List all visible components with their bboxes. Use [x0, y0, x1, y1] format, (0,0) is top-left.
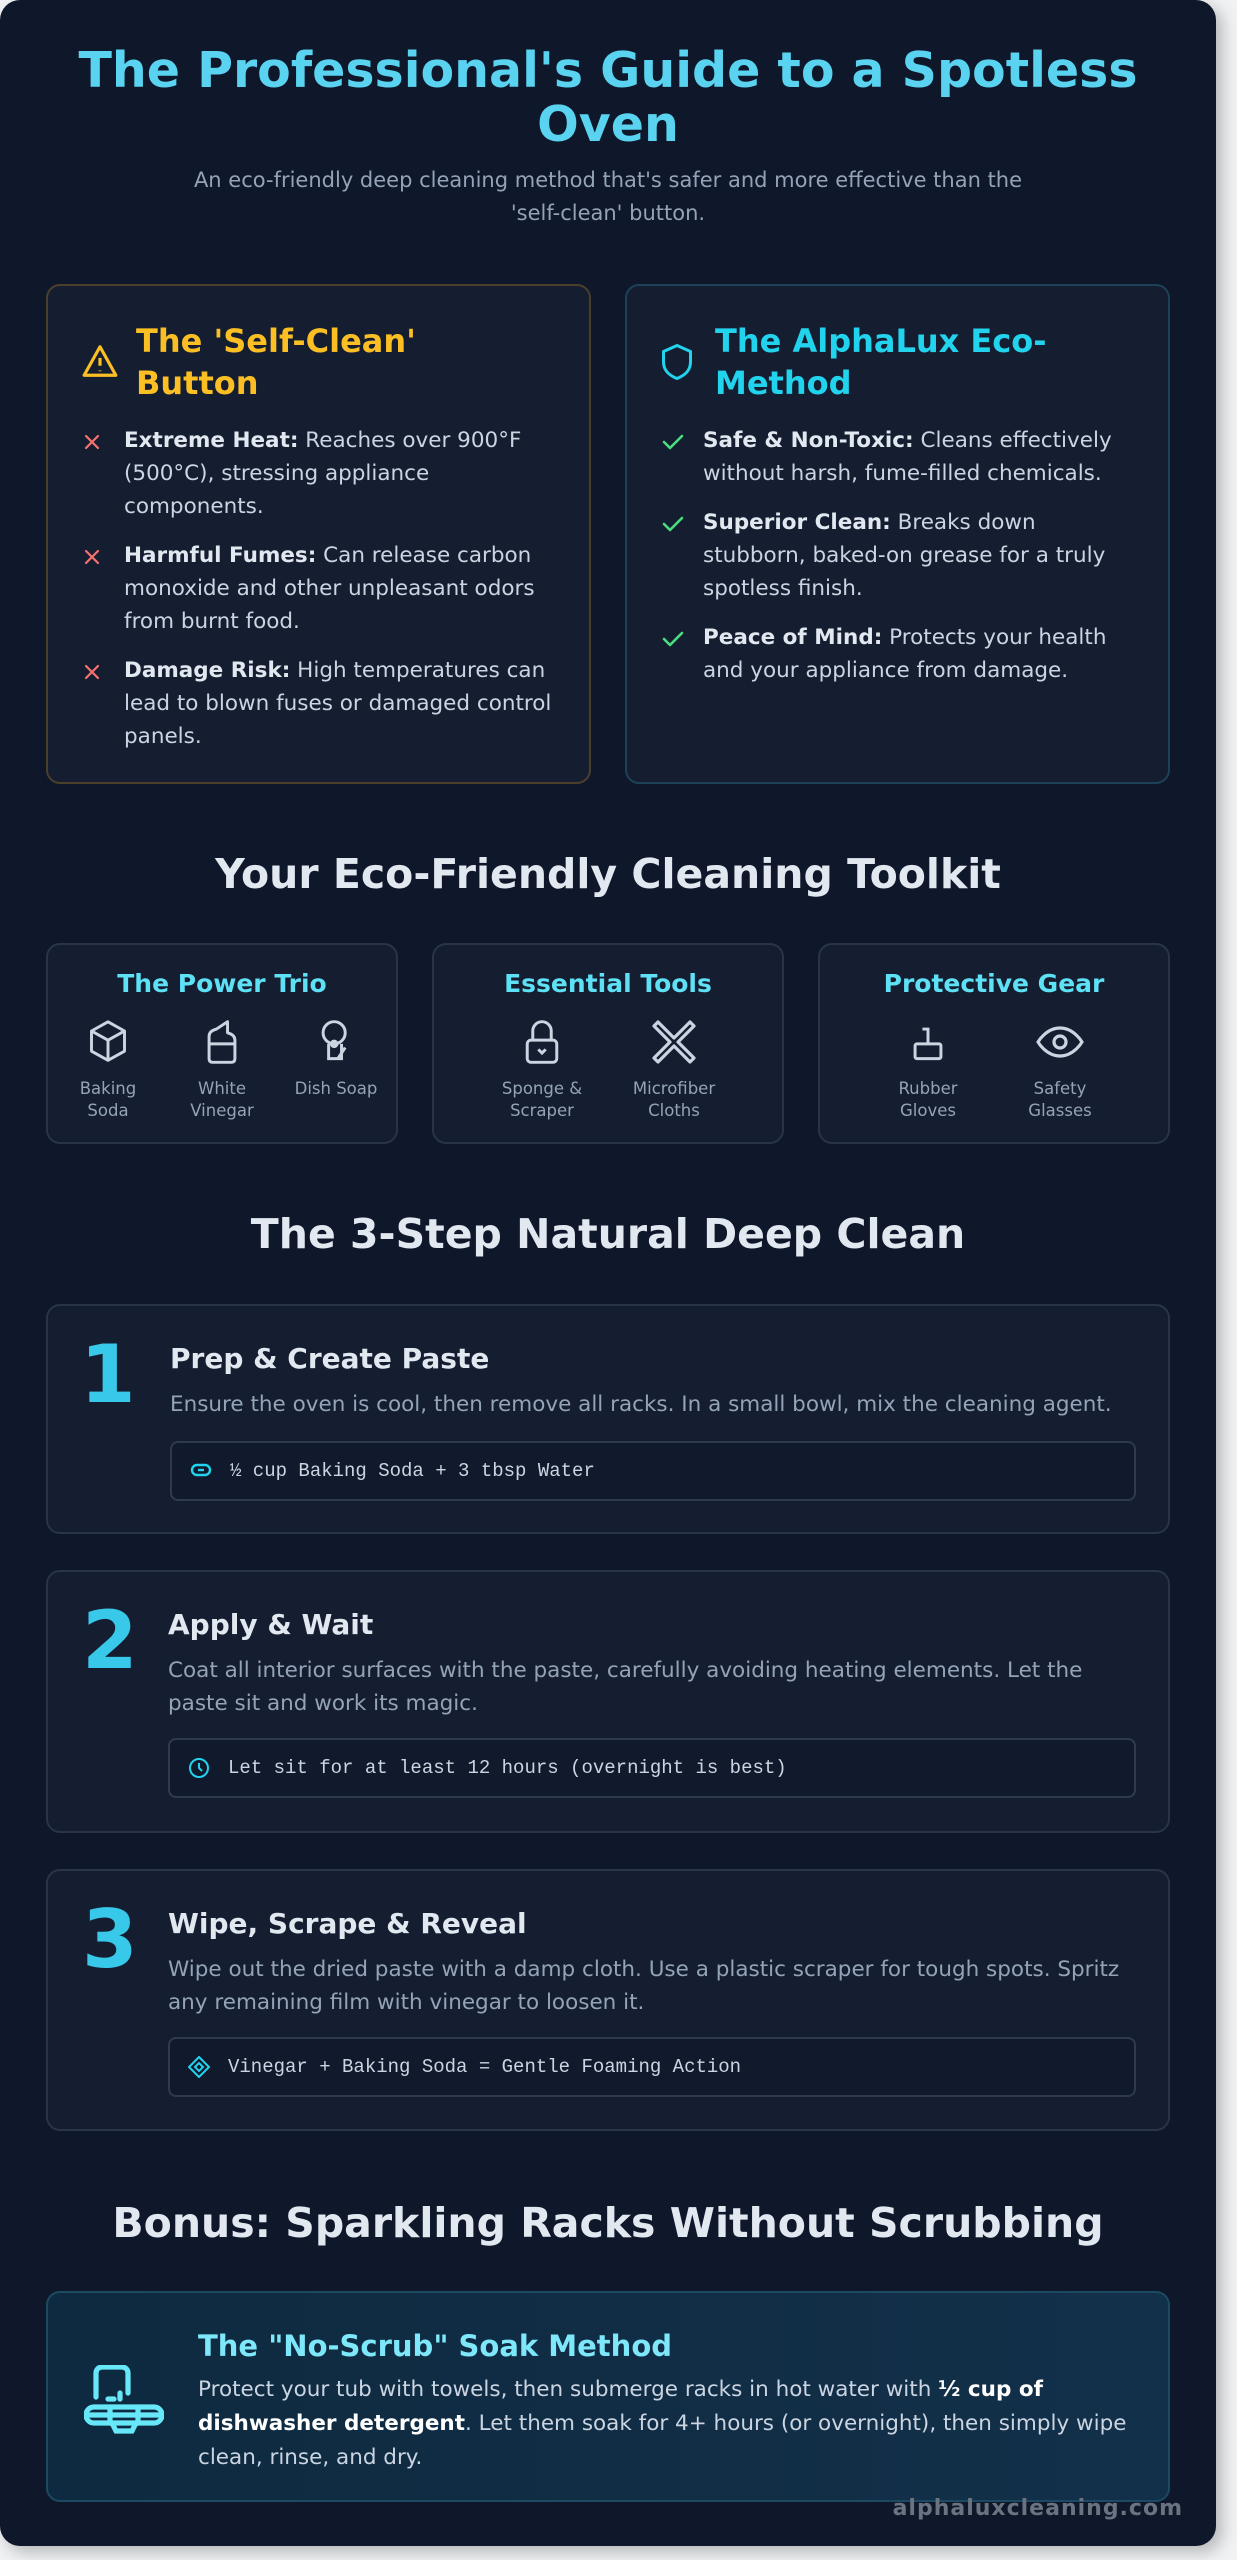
icon: gloves: Rubber Gloves — [898, 1079, 958, 1120]
list: benefits: Superior Clean: Breaks down stubborn, baked-on grease for a truly spotless finish. — [703, 510, 1105, 601]
heading: self-clean — [136, 322, 416, 402]
bonus text: Protect your tub with towels, then submerge racks in hot water with ½ cup of dishwasher detergent. Let them soak for 4+ hours (or overnight), then simply wipe clean, rinse, and dry. — [198, 2377, 1126, 2470]
code: foaming — [168, 2037, 1136, 2097]
icon: sponge — [502, 1020, 582, 1120]
icon: dish soap — [295, 1020, 377, 1098]
panel: step 2: Coat all interior surfaces with the paste, carefully avoiding heating elements. Let the paste sit and work its magic. — [168, 1658, 1082, 1716]
icon: sponge: Sponge & Scraper — [502, 1079, 582, 1120]
list: drawbacks — [84, 428, 551, 749]
panel: self-clean button — [46, 284, 591, 784]
panel: step 3 — [46, 1869, 1170, 2131]
panel: bonus soak — [46, 2291, 1170, 2502]
panel: protective gear: Protective Gear — [884, 969, 1104, 998]
list: drawbacks: Extreme Heat: Reaches over 900°F (500°C), stressing appliance components. — [124, 428, 521, 519]
footer: website: alphaluxcleaning.com — [893, 2496, 1183, 2521]
heading: toolkit: Your Eco-Friendly Cleaning Toolkit — [215, 850, 1001, 898]
heading: self-clean: The 'Self-Clean' — [136, 322, 416, 360]
panel: power trio — [46, 943, 398, 1144]
panel: step 3: Wipe, Scrape & Reveal — [168, 1907, 527, 1940]
heading: bonus: Bonus: Sparkling Racks Without Scrubbing — [112, 2199, 1104, 2247]
icon: shield — [662, 344, 692, 380]
icon: eye: Safety Glasses — [1028, 1079, 1092, 1120]
icon: tub — [84, 2365, 164, 2434]
panel: step 1: Prep & Create Paste — [170, 1342, 489, 1375]
icon: dish soap: Dish Soap — [295, 1079, 377, 1098]
code: recipe — [170, 1441, 1136, 1501]
panel: protective gear — [818, 943, 1170, 1144]
heading: eco method — [715, 322, 1047, 402]
code: timer — [168, 1738, 1136, 1798]
panel: eco method — [625, 284, 1170, 784]
icon: baking soda: Baking Soda — [80, 1079, 136, 1120]
title: The Professional's Guide to a Spotless Oven — [78, 42, 1138, 153]
list: benefits: Peace of Mind: Protects your health and your appliance from damage. — [703, 625, 1106, 683]
list: benefits — [662, 428, 1112, 683]
icon: vinegar — [190, 1020, 254, 1120]
panel: step 3: 3 — [82, 1893, 138, 1986]
panel: step 1 — [46, 1304, 1170, 1534]
panel: step 1: Ensure the oven is cool, then remove all racks. In a small bowl, mix the cleaning agent. — [170, 1392, 1112, 1417]
heading: eco method: The AlphaLux Eco- — [715, 322, 1047, 360]
heading: eco method: Method — [715, 364, 852, 402]
heading: 3-step: The 3-Step Natural Deep Clean — [251, 1210, 965, 1258]
icon: warning — [82, 345, 118, 377]
panel: step 1: 1 — [80, 1328, 136, 1421]
icon: eye — [1028, 1026, 1092, 1120]
icon: vinegar: White Vinegar — [190, 1079, 254, 1120]
panel: essential tools — [432, 943, 784, 1144]
list: drawbacks: Harmful Fumes: Can release carbon monoxide and other unpleasant odors from burnt food. — [124, 543, 535, 634]
icon: microfiber: Microfiber Cloths — [633, 1079, 715, 1120]
code: foaming: Vinegar + Baking Soda = Gentle Foaming Action — [228, 2056, 741, 2078]
list: benefits: Safe & Non-Toxic: Cleans effectively without harsh, fume-filled chemicals. — [703, 428, 1112, 486]
list: drawbacks: Damage Risk: High temperatures can lead to blown fuses or damaged control panels. — [124, 658, 551, 749]
icon: microfiber — [633, 1020, 716, 1120]
panel: step 2: 2 — [82, 1594, 138, 1687]
subtitle: An eco-friendly deep cleaning method that's safer and more effective than the 'self-clean' button. — [194, 168, 1022, 225]
panel: step 2 — [46, 1570, 1170, 1833]
code: timer: Let sit for at least 12 hours (overnight is best) — [228, 1757, 787, 1779]
heading: self-clean: Button — [136, 364, 259, 402]
panel: step 3: Wipe out the dried paste with a damp cloth. Use a plastic scraper for tough spots. Spritz any remaining film with vinegar to loosen it. — [168, 1957, 1119, 2015]
code: recipe: ½ cup Baking Soda + 3 tbsp Water — [230, 1460, 595, 1482]
bonus title: The "No-Scrub" Soak Method — [198, 2329, 672, 2363]
panel: essential tools: Essential Tools — [504, 969, 712, 998]
icon: gloves — [898, 1028, 958, 1120]
icon: baking soda — [80, 1020, 136, 1120]
panel: step 2: Apply & Wait — [168, 1608, 373, 1641]
panel: power trio: The Power Trio — [117, 969, 327, 998]
